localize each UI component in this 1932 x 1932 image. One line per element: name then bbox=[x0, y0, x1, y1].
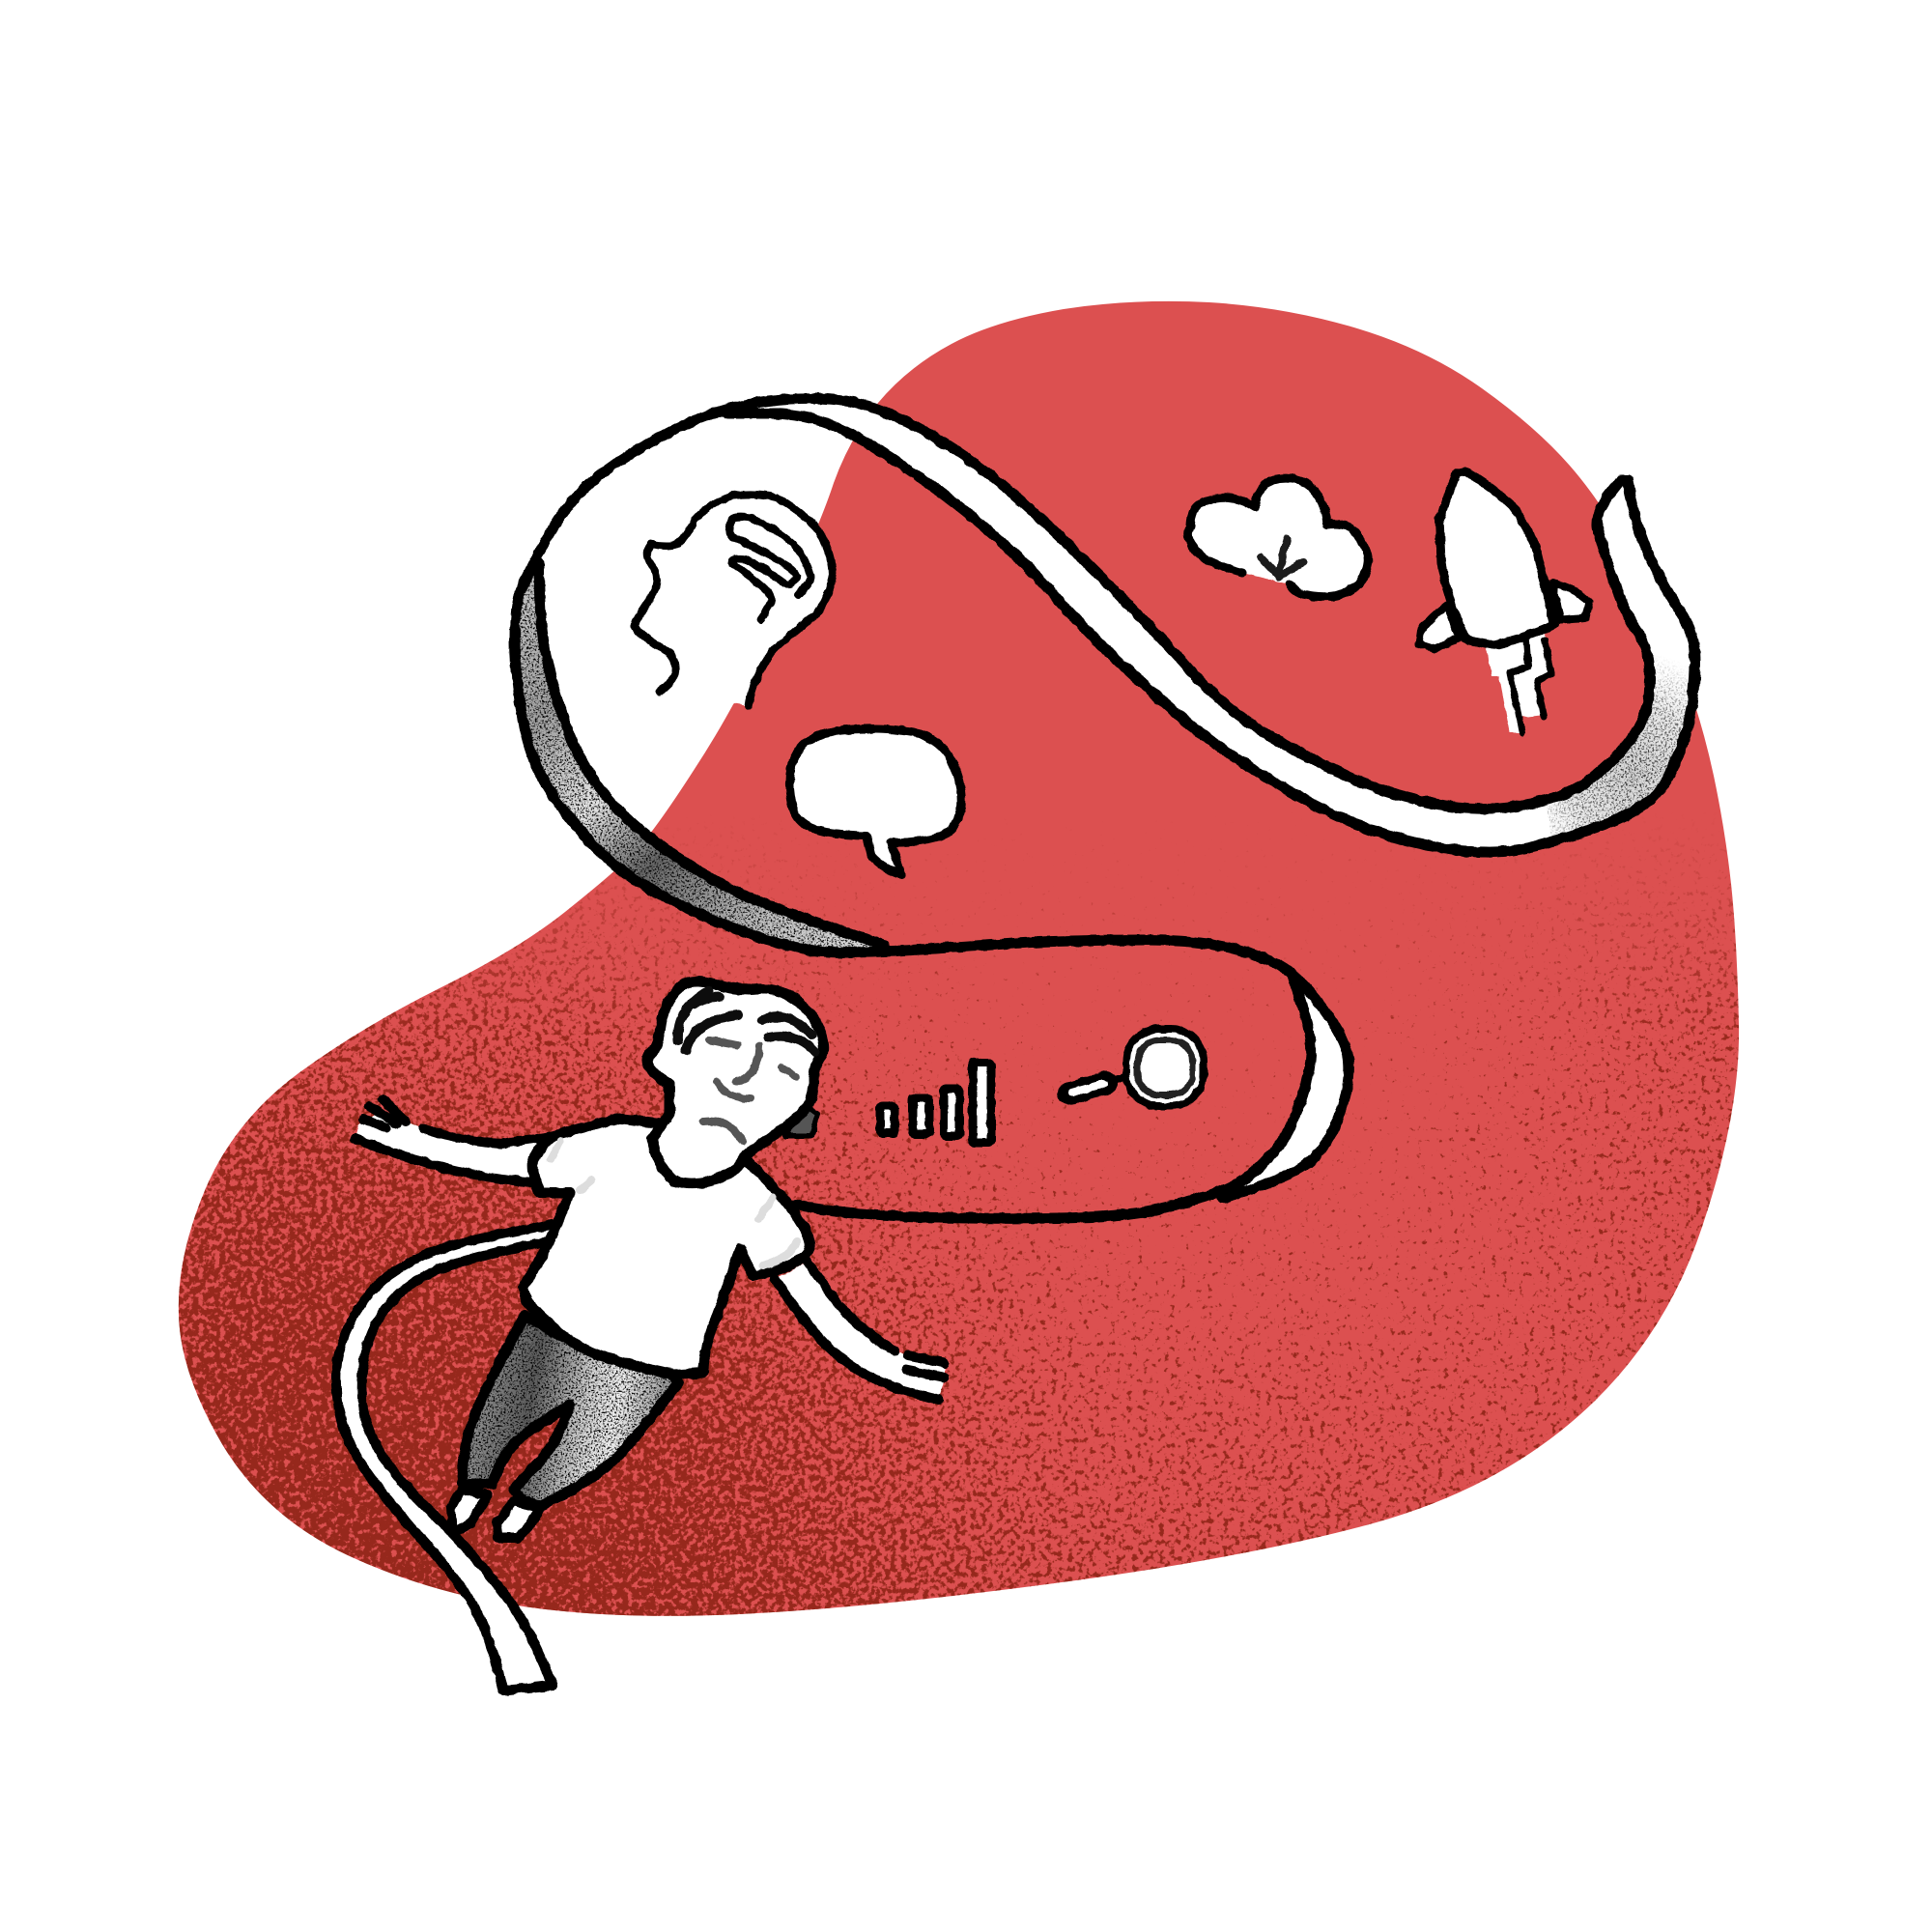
icon: signal bars bbox=[880, 1063, 991, 1143]
outer ribbon edge bbox=[515, 398, 1650, 1198]
left fin bbox=[1419, 606, 1460, 649]
left arm bbox=[355, 1099, 553, 1182]
face features bbox=[703, 1040, 796, 1141]
lens inner ring bbox=[1138, 1039, 1192, 1095]
ribbon tail bbox=[336, 1225, 553, 1690]
red blob background bbox=[179, 301, 1739, 1616]
handle bbox=[1069, 1083, 1106, 1094]
head bbox=[647, 981, 824, 1183]
rocket body bbox=[1439, 471, 1554, 645]
grey underside of loop bbox=[515, 563, 884, 952]
rocket flame bbox=[1486, 633, 1551, 732]
upper ribbon white band bbox=[720, 395, 1694, 852]
person bbox=[355, 981, 945, 1538]
handle highlight bbox=[1072, 1084, 1103, 1093]
illustration: person floating along a ribbon bbox=[178, 301, 1739, 1696]
shirt shading bbox=[551, 1142, 797, 1265]
crescent of lower hairpin bbox=[1221, 973, 1349, 1201]
lens connector bbox=[1106, 1075, 1130, 1083]
ribbon outlines bbox=[515, 398, 1694, 1218]
right ear bbox=[785, 1104, 818, 1136]
lower edge of upper band bbox=[728, 413, 1694, 852]
right shoe bbox=[497, 1501, 540, 1538]
inner edge of loop bbox=[539, 563, 884, 945]
trousers bbox=[462, 1316, 678, 1506]
icon: speech bubble bbox=[789, 728, 961, 874]
lens outer ring bbox=[1126, 1029, 1204, 1106]
hair lines bbox=[678, 991, 815, 1052]
icon: cloud download bbox=[1188, 478, 1368, 597]
icon: rocket bbox=[1419, 471, 1589, 732]
icon: head with brain bbox=[634, 495, 833, 706]
rocket flame outlines bbox=[1510, 640, 1551, 732]
right fin bbox=[1552, 582, 1589, 620]
right arm bbox=[775, 1262, 945, 1400]
t-shirt bbox=[523, 1119, 810, 1375]
shaded end of upper ribbon bbox=[1546, 628, 1694, 841]
speckled dark-red grain on blob bbox=[178, 837, 1739, 1616]
left shoe bbox=[451, 1489, 488, 1533]
inner edge of lower hairpin bbox=[796, 973, 1311, 1218]
icon: magnifying glass bbox=[1069, 1029, 1204, 1106]
hand-drawn artwork bbox=[336, 395, 1694, 1690]
